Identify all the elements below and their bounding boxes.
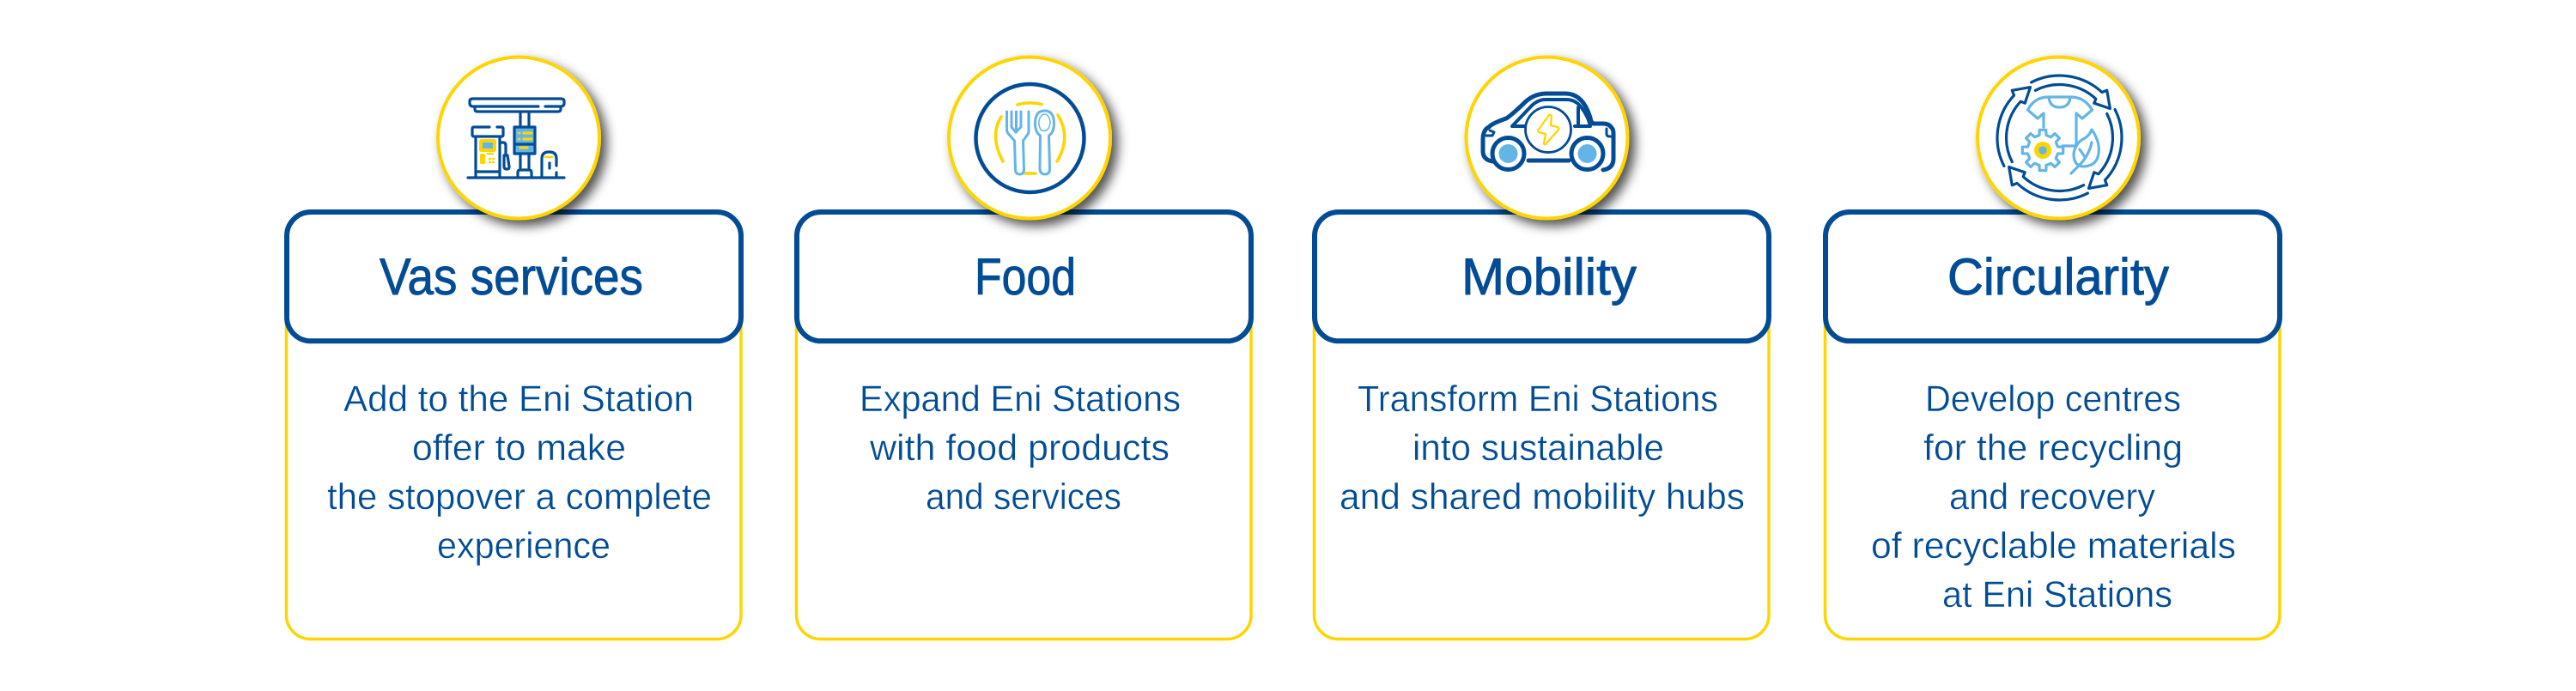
text block: Vas services: Add to the Eni Station — [343, 379, 694, 420]
heading: Circularity: Circularity — [1947, 248, 2169, 306]
text block: Food: Expand Eni Stations — [860, 379, 1181, 420]
heading: Food: Food — [975, 248, 1076, 306]
text block: Vas services: experience — [437, 525, 611, 567]
text block: Vas services: the stopover a complete — [327, 476, 712, 518]
icon: plate with fork and spoon — [975, 84, 1084, 192]
icon circle: Food — [949, 57, 1110, 218]
heading: Mobility: Mobility — [1461, 248, 1637, 306]
header box: Food — [797, 212, 1251, 341]
icon: fuel station — [468, 99, 564, 178]
text block: Circularity: of recyclable materials — [1871, 525, 2236, 567]
text block: Mobility: and shared mobility hubs — [1340, 476, 1745, 518]
body box: Food — [797, 258, 1251, 639]
header box: Mobility — [1315, 212, 1769, 341]
text block: Food: with food products — [869, 427, 1170, 469]
text block: Circularity: at Eni Stations — [1942, 574, 2172, 615]
panel: Circularity — [1826, 57, 2280, 639]
heading: Vas services: Vas services — [380, 248, 643, 306]
text block: Circularity — [1871, 379, 2236, 615]
icon circle: Circularity — [1978, 57, 2139, 218]
text block: Vas services — [327, 379, 712, 567]
text block: Mobility: Transform Eni Stations — [1358, 379, 1718, 420]
text block: Food: and services — [926, 476, 1121, 518]
header box: Circularity — [1826, 212, 2280, 341]
icon circle: Vas services — [438, 57, 599, 218]
icon: electric car — [1483, 94, 1613, 170]
text block: Circularity: and recovery — [1949, 476, 2155, 518]
text block: Circularity: for the recycling — [1923, 427, 2183, 469]
icon: circular economy — [1997, 76, 2122, 200]
text block: Mobility: into sustainable — [1413, 427, 1664, 469]
panel: Mobility — [1314, 57, 1769, 639]
header box: Vas services — [287, 212, 741, 341]
icon circle: Mobility — [1467, 57, 1628, 218]
body box: Vas services — [287, 258, 741, 639]
text block: Mobility — [1340, 379, 1745, 518]
body box: Mobility — [1314, 258, 1769, 639]
body box: Circularity — [1826, 258, 2280, 639]
text block: Food — [860, 379, 1181, 518]
text block: Vas services: offer to make — [412, 427, 626, 469]
text block: Circularity: Develop centres — [1925, 379, 2181, 420]
panel: Vas services — [287, 57, 741, 639]
panel: Food — [797, 57, 1251, 639]
